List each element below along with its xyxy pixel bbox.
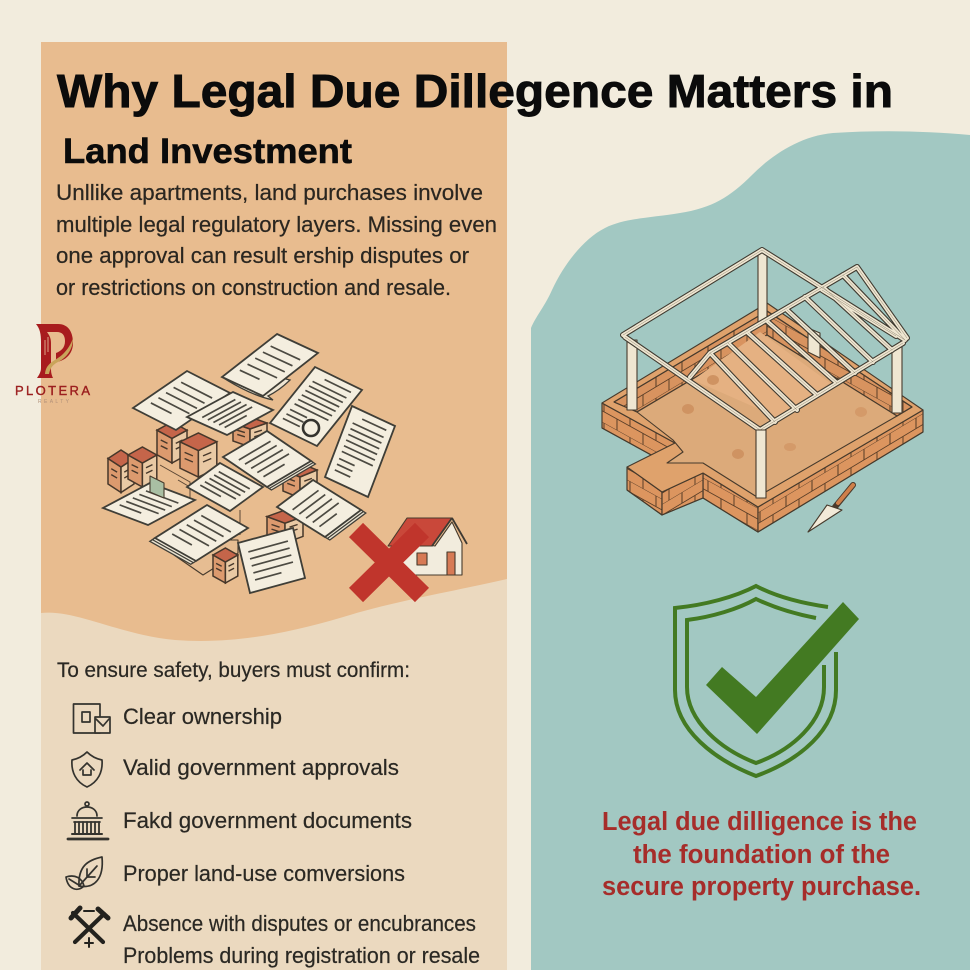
icon: red cross <box>356 530 422 595</box>
panel: left peach column <box>41 42 507 970</box>
icon: green shield with check mark <box>675 586 859 776</box>
cream door piece <box>808 328 820 358</box>
trowel <box>808 485 853 532</box>
text block: intro paragraph: Unllike apartments, land purchases involve <box>56 180 483 205</box>
list item: land-use conversions: Proper land-use comversions <box>123 861 405 886</box>
foundation top surface <box>602 303 923 507</box>
text block: intro paragraph: multiple legal regulatory layers. Missing even <box>56 212 497 237</box>
text block: conclusion: Legal due dilligence is the <box>602 808 917 836</box>
text block: intro paragraph: one approval can result ership disputes or <box>56 243 469 268</box>
back wall inner brick faces <box>614 311 912 416</box>
list item: disputes and problems: Problems during registration or resale <box>123 943 480 968</box>
icon: house <box>388 518 467 575</box>
list item: disputes and problems: Absence with disputes or encubrances <box>123 911 476 936</box>
roof beams and rafters <box>623 250 907 430</box>
text block: intro paragraph <box>56 180 497 300</box>
list item: government approvals: Valid government approvals <box>123 755 399 780</box>
front post <box>756 430 766 498</box>
list item: government documents: Fakd government documents <box>123 808 412 833</box>
icon: shield with house <box>72 752 102 787</box>
floor <box>637 335 897 497</box>
text: checklist intro: To ensure safety, buyers must confirm: <box>57 659 410 682</box>
logo: Plotera Realty: REALTY <box>38 399 70 405</box>
text block: conclusion <box>602 808 921 901</box>
text block: conclusion: secure property purchase. <box>602 873 921 901</box>
illustration: brick foundation with timber roof frame <box>602 250 923 532</box>
icon: ownership document <box>74 704 110 733</box>
subtitle: Land Investment <box>63 132 352 171</box>
list item: clear ownership <box>74 704 282 733</box>
logo: Plotera Realty <box>15 324 90 405</box>
icon: government building <box>68 802 108 839</box>
panel: lower cream wave area <box>41 579 507 970</box>
illustration: scattered documents and buildings <box>103 334 395 593</box>
icon: crossed hammers <box>71 908 108 947</box>
sand mound <box>693 332 830 417</box>
back and side posts <box>627 252 902 413</box>
list item: clear ownership: Clear ownership <box>123 704 282 729</box>
text block: intro paragraph: or restrictions on construction and resale. <box>56 275 451 300</box>
list item: land-use conversions <box>66 857 405 889</box>
list item: government documents <box>68 802 412 839</box>
list item: disputes and problems <box>71 908 480 968</box>
foundation outer faces <box>602 403 923 532</box>
list item: government approvals <box>72 752 399 787</box>
title: Why Legal Due Dillegence Matters in <box>57 65 893 117</box>
panel: right teal blob <box>531 131 970 970</box>
text block: conclusion: the foundation of the <box>633 841 890 869</box>
logo: Plotera Realty: PLOTERA <box>15 383 90 398</box>
icon: leaves <box>66 857 102 889</box>
